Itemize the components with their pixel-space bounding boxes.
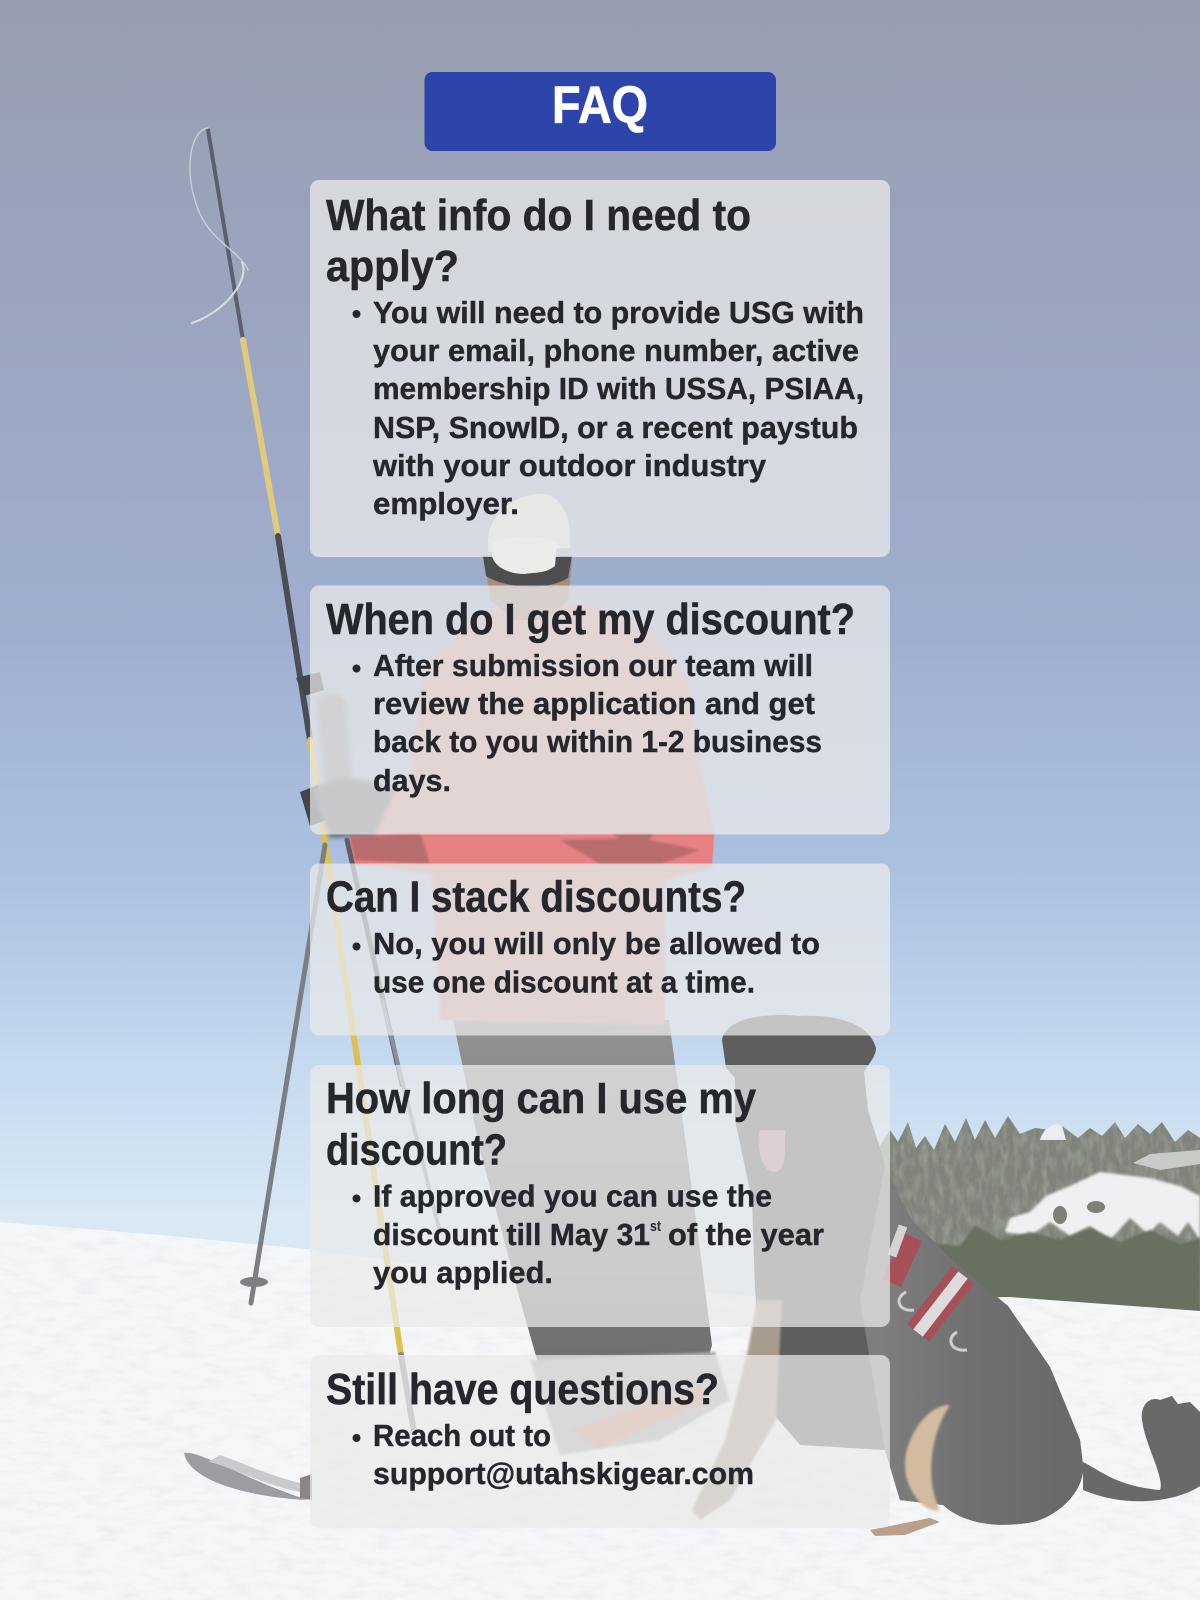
- bullet: contact: support@utahskigear.com: [373, 1456, 754, 1491]
- bullet: stacking: No, you will only be allowed to: [373, 926, 820, 961]
- forest on hill: [860, 1116, 1200, 1315]
- dog back shading: [860, 1165, 1083, 1525]
- bullet: validity: If approved you can use the: [373, 1178, 772, 1214]
- dog tail: [1083, 1396, 1200, 1501]
- heading: how long: [326, 1074, 756, 1174]
- dog body: [722, 1015, 1083, 1525]
- person head with hat and goggles: [483, 494, 572, 620]
- heading: what info: What info do I need to: [326, 191, 751, 240]
- pole basket: [240, 1277, 268, 1287]
- ski poles: [190, 128, 440, 1432]
- goggles: [483, 556, 572, 587]
- panel: how long can I use my discount: [310, 1065, 890, 1327]
- bullet: validity: discount till May 31: [373, 1217, 650, 1252]
- person legs: [453, 1020, 712, 1370]
- bullet: validity: st: [650, 1218, 661, 1235]
- dog tan markings: [905, 1405, 950, 1511]
- snow ground: [0, 1222, 1200, 1600]
- hat: [488, 494, 570, 552]
- bullet: validity: of the year: [668, 1217, 824, 1252]
- person jacket: [350, 605, 714, 1025]
- bullet: validity: [352, 1178, 824, 1290]
- panel: when do I get my discount: [310, 586, 890, 834]
- bullet: timing: [352, 648, 822, 798]
- heading: how long: discount?: [326, 1126, 507, 1174]
- bullet: info needed: NSP, SnowID, or a recent paystub: [373, 410, 858, 445]
- panel: what info do I need to apply: [310, 180, 890, 557]
- heading: when: When do I get my discount?: [326, 595, 855, 644]
- pole grips and glove: [296, 672, 395, 838]
- dog harness: [892, 1226, 967, 1350]
- heading: how long: How long can I use my: [326, 1074, 756, 1123]
- dog tongue: [759, 1130, 785, 1172]
- bullet: contact: Reach out to: [373, 1418, 551, 1453]
- bullet: contact: [352, 1418, 754, 1491]
- dog paw: [870, 1518, 940, 1536]
- panel: can I stack discounts: [310, 864, 890, 1036]
- bullet: timing: review the application and get: [373, 686, 815, 721]
- bullet: timing: back to you within 1-2 business: [373, 724, 822, 759]
- heading: what info: [326, 191, 751, 291]
- bullet: info needed: You will need to provide USG with: [373, 295, 864, 330]
- bullet: stacking: use one discount at a time.: [373, 964, 755, 1000]
- bullet: stacking: [352, 926, 820, 1000]
- bullet: info needed: [352, 295, 864, 521]
- bullet: timing: days.: [373, 763, 451, 798]
- bullet: info needed: with your outdoor industry: [372, 448, 767, 483]
- jacket lit band with folds: [350, 832, 714, 866]
- bullet: validity: you applied.: [373, 1255, 553, 1290]
- bullet: info needed: membership ID with USSA, PSIAA,: [373, 371, 864, 406]
- heading: questions: Still have questions?: [326, 1365, 719, 1414]
- heading: stack: Can I stack discounts?: [326, 872, 746, 922]
- dog forelegs: [692, 1300, 782, 1520]
- title: FAQ: [552, 76, 648, 134]
- bullet: timing: After submission our team will: [373, 648, 813, 683]
- bullet: info needed: your email, phone number, active: [373, 333, 859, 368]
- heading: what info: apply?: [326, 242, 459, 291]
- panel: title banner: [424, 72, 776, 151]
- panel: still have questions: [310, 1355, 890, 1528]
- face: [486, 560, 572, 620]
- bullet: info needed: employer.: [373, 486, 519, 521]
- goggle lens: [492, 537, 557, 574]
- person boots and skis: [184, 1352, 730, 1500]
